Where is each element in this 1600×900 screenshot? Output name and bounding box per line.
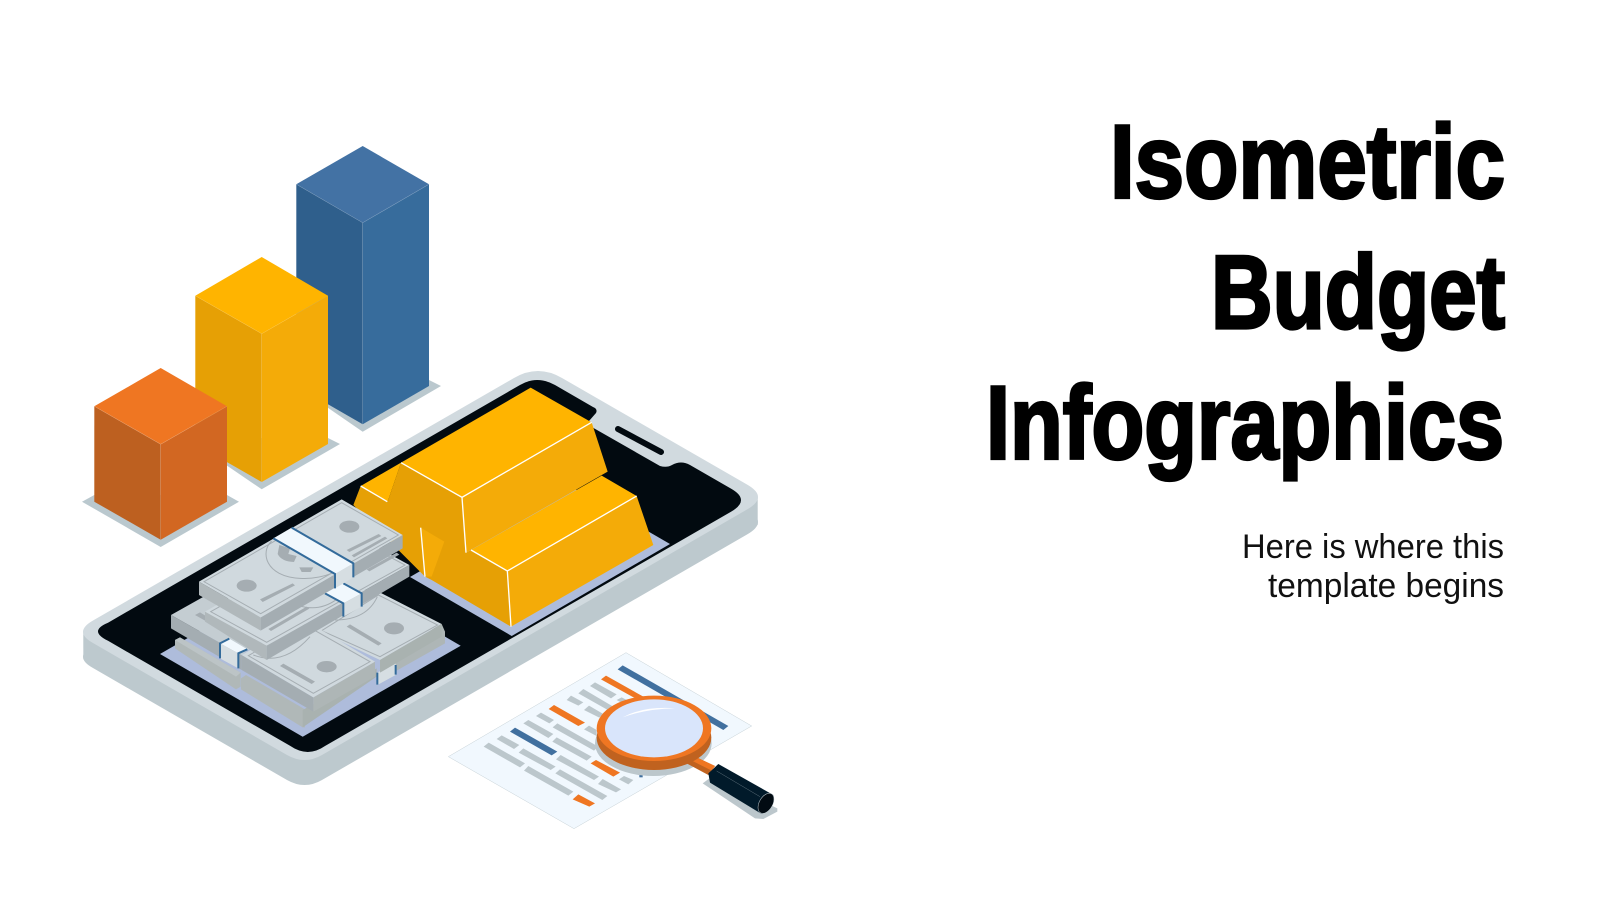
cash stacks: [171, 499, 445, 727]
subtitle: [1242, 528, 1504, 605]
bar chart: isometric columns: [82, 146, 441, 547]
low brick front: [241, 668, 377, 727]
column: orange: [82, 368, 239, 547]
bill front: [242, 619, 375, 712]
band on left bill: [220, 639, 247, 668]
bill left middle: [171, 595, 273, 670]
bill back right: [317, 592, 445, 685]
document with magnifying glass: [448, 653, 777, 829]
rim side: [597, 705, 711, 770]
rear bar small top: [361, 463, 401, 502]
handle neck: [687, 755, 715, 775]
bill top: [199, 499, 403, 631]
handle shadow: [703, 777, 777, 819]
column: yellow: [195, 257, 340, 489]
handle grip: [708, 764, 774, 814]
magnifying glass: [595, 696, 777, 819]
gold bar highlights: [361, 422, 637, 627]
phone: [83, 371, 758, 785]
bar body shadow side: [353, 463, 511, 627]
phone speaker: [618, 429, 661, 452]
phone screen: [98, 380, 741, 752]
lens highlight: [623, 708, 675, 717]
band on top bill: [273, 528, 353, 588]
blue rows: [510, 665, 728, 777]
low brick left: [175, 637, 241, 689]
title line 2: Budget: [1211, 235, 1505, 351]
upper bar top: [401, 388, 592, 497]
dollar symbol on top bill: [278, 545, 313, 572]
title line 3: Infographics: [986, 366, 1504, 482]
pad under gold: [410, 485, 670, 636]
lower bar right side: [507, 496, 653, 627]
column: blue: [296, 146, 441, 432]
gold bars: [353, 388, 653, 627]
phone body side: [83, 371, 758, 785]
orange rows: [549, 676, 643, 807]
gold bar end highlight: [421, 528, 444, 577]
title line 1: Isometric: [1110, 104, 1505, 220]
lens shadow: [595, 711, 712, 776]
pad under cash: [160, 563, 461, 737]
subtitle line 1: Here is where this: [1242, 528, 1504, 566]
document table rows: [484, 682, 633, 800]
lower bar top: [471, 476, 637, 571]
paper: [448, 653, 752, 829]
title: [986, 104, 1505, 482]
lens: [605, 699, 703, 757]
rim top: [597, 696, 711, 761]
subtitle line 2: template begins: [1268, 567, 1504, 605]
band on middle bill: [325, 583, 362, 617]
upper bar right side: [462, 422, 608, 553]
bill middle: [205, 531, 409, 660]
phone top face: [83, 371, 758, 760]
